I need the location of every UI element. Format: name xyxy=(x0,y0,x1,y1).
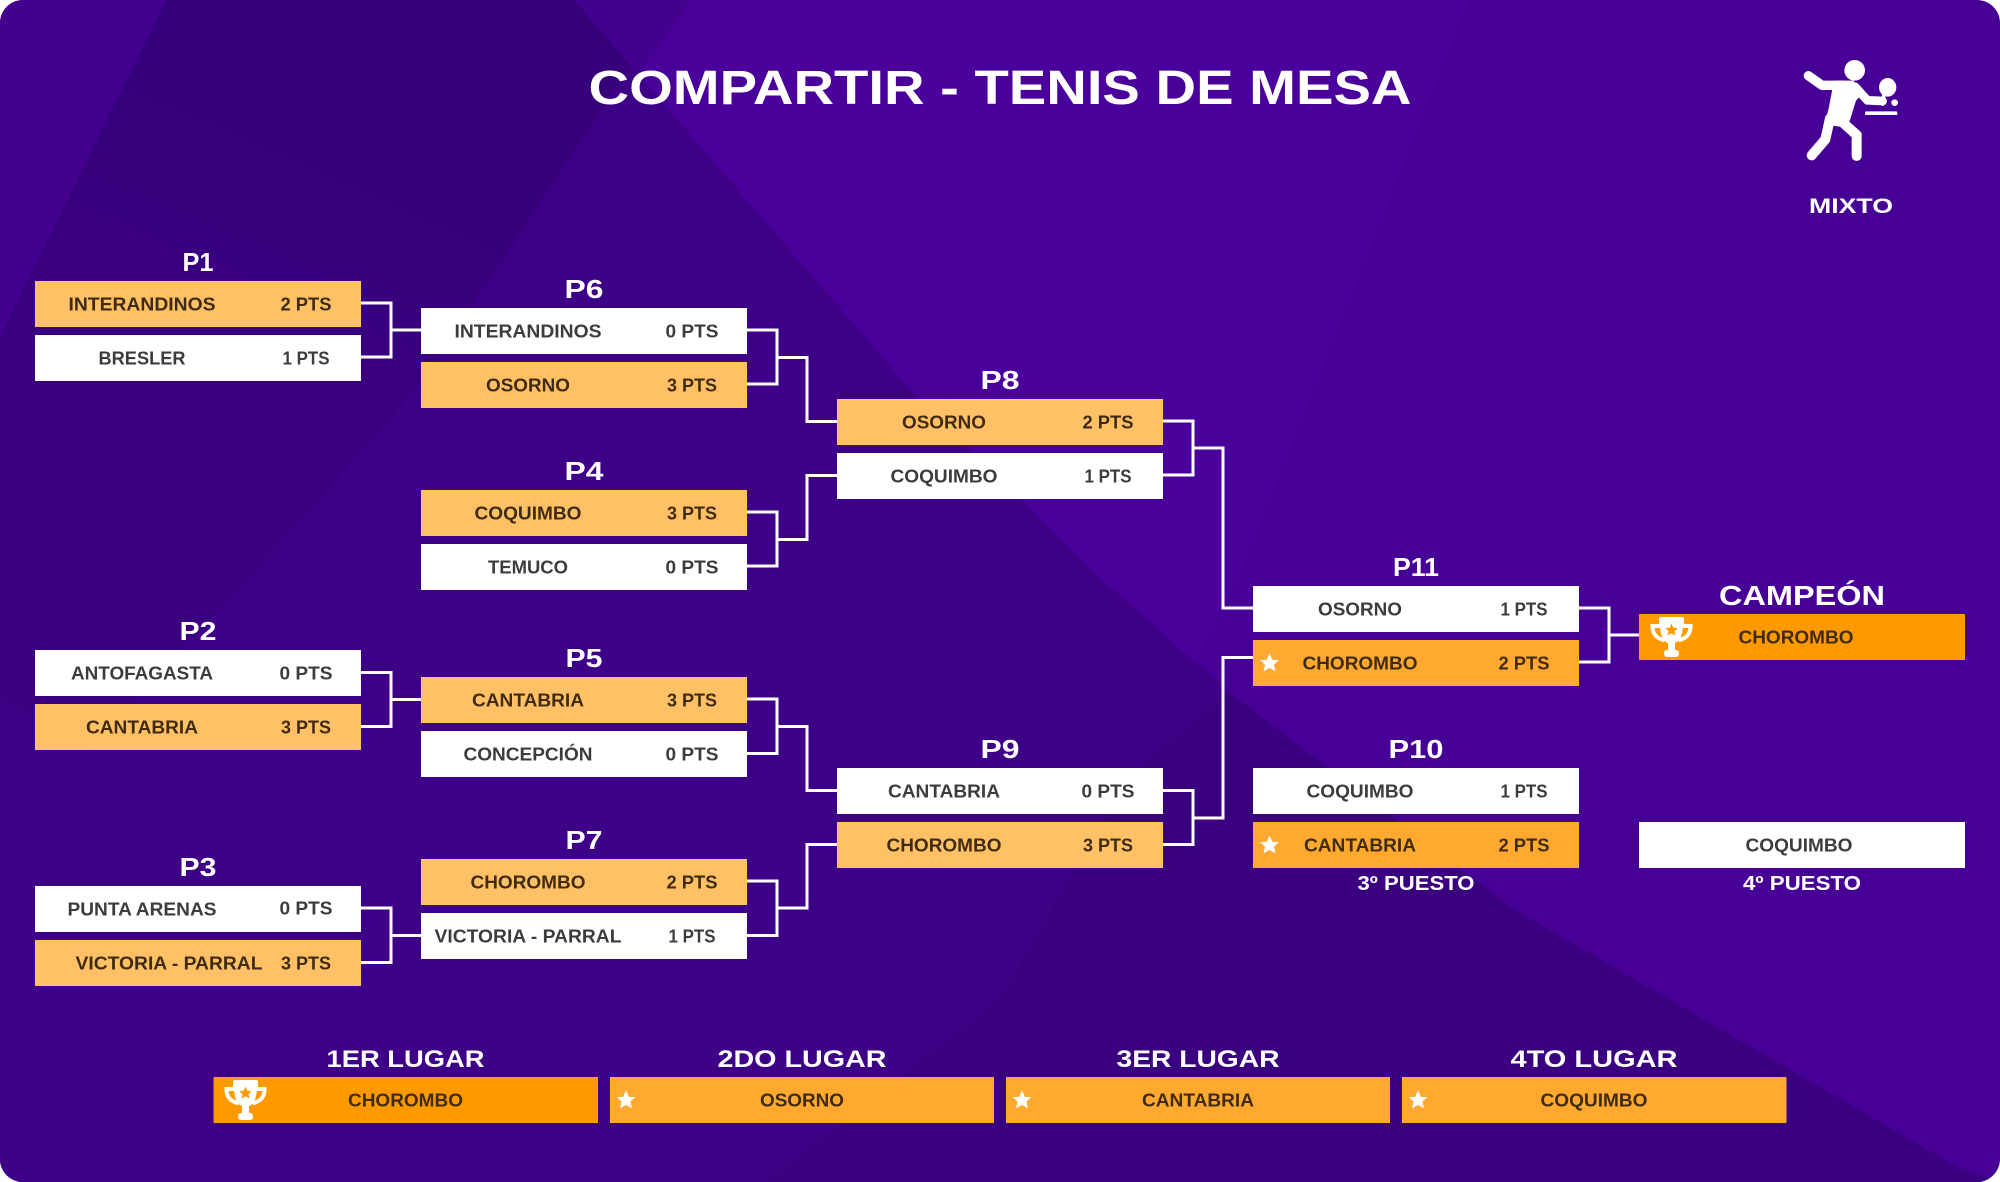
name 3rd: CANTABRIA xyxy=(1142,1090,1254,1110)
connector: P3 to P7 xyxy=(361,908,421,962)
team: Chorombo xyxy=(421,859,747,905)
match P4 xyxy=(421,456,747,590)
team: Victoria - Parral xyxy=(421,913,747,959)
heading: 2do lugar: 2DO LUGAR xyxy=(718,1046,886,1073)
match P10 xyxy=(1253,734,1579,868)
box 3rd xyxy=(1006,1077,1390,1123)
fourth place name: COQUIMBO xyxy=(1746,836,1852,856)
final standings: 3rd xyxy=(1006,1046,1390,1123)
name 1st: CHOROMBO xyxy=(348,1090,463,1110)
heading P4: P4 xyxy=(564,456,604,486)
team: Victoria - Parral: 1 PTS xyxy=(668,926,716,946)
team: Temuco xyxy=(421,544,747,590)
team: Cantabria: 2 PTS xyxy=(1498,836,1550,856)
connector: P9 to P11 xyxy=(1163,658,1253,844)
fourth place panel xyxy=(1639,822,1965,895)
final standings: 2nd xyxy=(610,1046,994,1123)
heading: 4to lugar: 4TO LUGAR xyxy=(1510,1046,1678,1073)
heading: 3er lugar: 3ER LUGAR xyxy=(1116,1046,1280,1073)
team: Chorombo: CHOROMBO xyxy=(470,872,586,892)
team: Interandinos: INTERANDINOS xyxy=(454,322,602,342)
team: Chorombo xyxy=(1253,640,1579,686)
team: Osorno xyxy=(1253,586,1579,632)
team: Victoria - Parral: VICTORIA - PARRAL xyxy=(434,926,622,946)
team: Coquimbo: COQUIMBO xyxy=(890,466,998,486)
heading: campeón: CAMPEÓN xyxy=(1719,580,1885,611)
connector: P5 to P9 xyxy=(747,699,837,790)
fourth place label: 4º PUESTO xyxy=(1743,873,1861,895)
team: Interandinos: 0 PTS xyxy=(666,322,718,342)
heading P11: P11 xyxy=(1393,552,1439,582)
team: Antofagasta: 0 PTS xyxy=(280,664,332,684)
final standings: 4th xyxy=(1402,1046,1786,1123)
match P2 xyxy=(35,616,361,750)
team: Osorno: 2 PTS xyxy=(1082,412,1134,432)
team: Cantabria: 3 PTS xyxy=(281,718,331,738)
match P6 xyxy=(421,274,747,408)
team: Osorno: OSORNO xyxy=(1318,600,1402,620)
heading P9: P9 xyxy=(980,734,1020,764)
category label: mixto: MIXTO xyxy=(1809,195,1893,218)
icon: trophy xyxy=(1652,617,1690,657)
team: Coquimbo: 1 PTS xyxy=(1500,782,1548,802)
team: Chorombo: CHOROMBO xyxy=(1302,654,1418,674)
team: Cantabria: CANTABRIA xyxy=(1304,836,1416,856)
team: Cantabria: CANTABRIA xyxy=(86,718,198,738)
team: Temuco: 0 PTS xyxy=(666,558,718,578)
box 1st xyxy=(214,1077,598,1123)
champion panel xyxy=(1639,580,1965,660)
team: Coquimbo: 3 PTS xyxy=(667,504,717,524)
team: Chorombo: 2 PTS xyxy=(1498,654,1550,674)
team: Victoria - Parral: VICTORIA - PARRAL xyxy=(76,954,262,974)
team: Cantabria: CANTABRIA xyxy=(472,690,584,710)
match P3 xyxy=(35,852,361,986)
team: Punta Arenas xyxy=(35,886,361,932)
name 2nd: OSORNO xyxy=(760,1090,844,1110)
connector: P2 to P5 xyxy=(361,672,421,726)
heading P2: P2 xyxy=(180,616,216,646)
team: Cantabria: 3 PTS xyxy=(667,690,717,710)
final standings: 1st xyxy=(214,1046,598,1123)
team: Cantabria xyxy=(421,677,747,723)
team: Chorombo: 2 PTS xyxy=(666,872,718,892)
box 4th xyxy=(1402,1077,1786,1123)
icon: star xyxy=(1409,1090,1427,1108)
team: Bresler: BRESLER xyxy=(98,348,186,368)
heading P7: P7 xyxy=(566,825,602,855)
team: Antofagasta: ANTOFAGASTA xyxy=(71,664,213,684)
heading: 1er lugar: 1ER LUGAR xyxy=(326,1046,484,1073)
connector: P8 to P11 xyxy=(1163,421,1253,608)
team: Interandinos xyxy=(421,308,747,354)
team: Temuco: TEMUCO xyxy=(488,558,568,578)
icon: table tennis player xyxy=(1808,60,1898,156)
match P9 xyxy=(837,734,1163,868)
team: Punta Arenas: PUNTA ARENAS xyxy=(68,900,216,920)
team: Interandinos: INTERANDINOS xyxy=(68,294,216,314)
team: Cantabria xyxy=(1253,822,1579,868)
third place label: 3º PUESTO xyxy=(1358,873,1474,895)
heading P1: P1 xyxy=(182,247,214,277)
team: Coquimbo xyxy=(421,490,747,536)
box 2nd xyxy=(610,1077,994,1123)
team: Cantabria xyxy=(35,704,361,750)
team: Coquimbo xyxy=(1253,768,1579,814)
team: Cantabria: CANTABRIA xyxy=(888,782,1000,802)
champion box xyxy=(1639,614,1965,660)
connector: P4 to P8 xyxy=(747,476,837,566)
team: Coquimbo: COQUIMBO xyxy=(1306,782,1414,802)
team: Cantabria xyxy=(837,768,1163,814)
team: Interandinos: 2 PTS xyxy=(280,294,332,314)
team: Chorombo: 3 PTS xyxy=(1083,836,1133,856)
team: Interandinos xyxy=(35,281,361,327)
heading P10: P10 xyxy=(1388,734,1444,764)
team: Osorno: 1 PTS xyxy=(1500,600,1548,620)
match P5 xyxy=(421,643,747,777)
team: Antofagasta xyxy=(35,650,361,696)
match P1 xyxy=(35,247,361,381)
team: Coquimbo: 1 PTS xyxy=(1084,466,1132,486)
connector: P11 to champion xyxy=(1579,608,1639,662)
match P7 xyxy=(421,825,747,959)
title: COMPARTIR - TENIS DE MESA xyxy=(588,62,1412,115)
team: Osorno: OSORNO xyxy=(902,412,986,432)
connector: P6 to P8 xyxy=(747,330,837,422)
heading P3: P3 xyxy=(180,852,216,882)
heading P5: P5 xyxy=(566,643,602,673)
icon: trophy xyxy=(226,1080,264,1120)
team: Concepción: CONCEPCIÓN xyxy=(464,744,592,764)
team: Victoria - Parral xyxy=(35,940,361,986)
team: Chorombo xyxy=(837,822,1163,868)
team: Osorno xyxy=(837,399,1163,445)
team: Osorno xyxy=(421,362,747,408)
champion name: CHOROMBO xyxy=(1738,628,1854,648)
team: Coquimbo xyxy=(837,453,1163,499)
team: Osorno: 3 PTS xyxy=(667,376,717,396)
team: Chorombo: CHOROMBO xyxy=(886,836,1002,856)
team: Concepción: 0 PTS xyxy=(666,744,718,764)
team: Punta Arenas: 0 PTS xyxy=(280,898,332,918)
heading P6: P6 xyxy=(564,274,604,304)
team: Bresler: 1 PTS xyxy=(282,348,330,368)
icon: star xyxy=(617,1090,635,1108)
fourth place box xyxy=(1639,822,1965,868)
team: Coquimbo: COQUIMBO xyxy=(474,504,582,524)
match P8 xyxy=(837,365,1163,499)
heading P8: P8 xyxy=(980,365,1020,395)
icon: star xyxy=(1013,1090,1031,1108)
match P11 xyxy=(1253,552,1579,686)
name 4th: COQUIMBO xyxy=(1540,1090,1648,1110)
team: Concepción xyxy=(421,731,747,777)
team: Cantabria: 0 PTS xyxy=(1082,782,1134,802)
team: Bresler xyxy=(35,335,361,381)
team: Osorno: OSORNO xyxy=(486,376,570,396)
team: Victoria - Parral: 3 PTS xyxy=(281,954,331,974)
connector: P7 to P9 xyxy=(747,844,837,936)
connector: P1 to P6 xyxy=(361,303,421,357)
